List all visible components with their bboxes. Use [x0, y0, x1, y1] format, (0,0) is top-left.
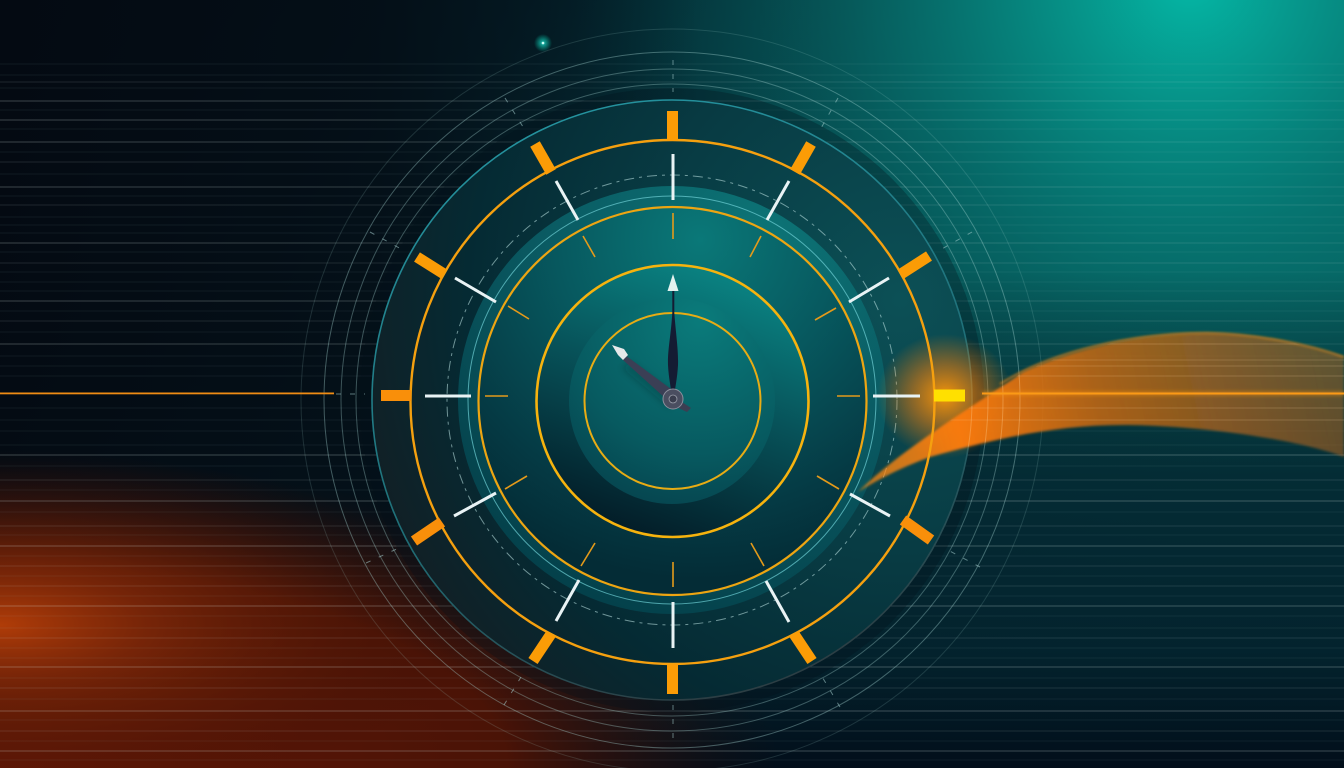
- white inner ticks: [425, 154, 920, 648]
- faint outer rings: [301, 29, 1043, 768]
- faint radial dashes: [336, 60, 980, 738]
- teal band disc: [458, 186, 886, 614]
- right orange horizon line: [982, 392, 1344, 394]
- dial outer disc: [372, 100, 972, 700]
- outer orange hour ticks: [381, 111, 931, 694]
- hour hand: [612, 345, 671, 398]
- tail and hub: [663, 389, 691, 412]
- thin cyan ring: [468, 196, 876, 604]
- orange rings: [410, 140, 934, 664]
- clock hands: [612, 274, 691, 412]
- raised cone disc: [536, 265, 808, 537]
- right side glow: [877, 334, 1013, 458]
- small orange ticks: [485, 213, 860, 587]
- yellow highlighted tick: [934, 390, 965, 402]
- orange swoosh: [858, 333, 1344, 492]
- minute hand: [668, 274, 678, 390]
- hand shadow: [622, 362, 676, 408]
- dashed ring: [447, 175, 897, 625]
- glowing dot: [534, 34, 552, 52]
- left orange horizon line: [0, 392, 334, 394]
- swoosh crossing rings: [968, 374, 1020, 447]
- inner dial disc: [569, 298, 775, 504]
- mid dial disc: [478, 207, 866, 595]
- dark halo around dial: [360, 88, 984, 712]
